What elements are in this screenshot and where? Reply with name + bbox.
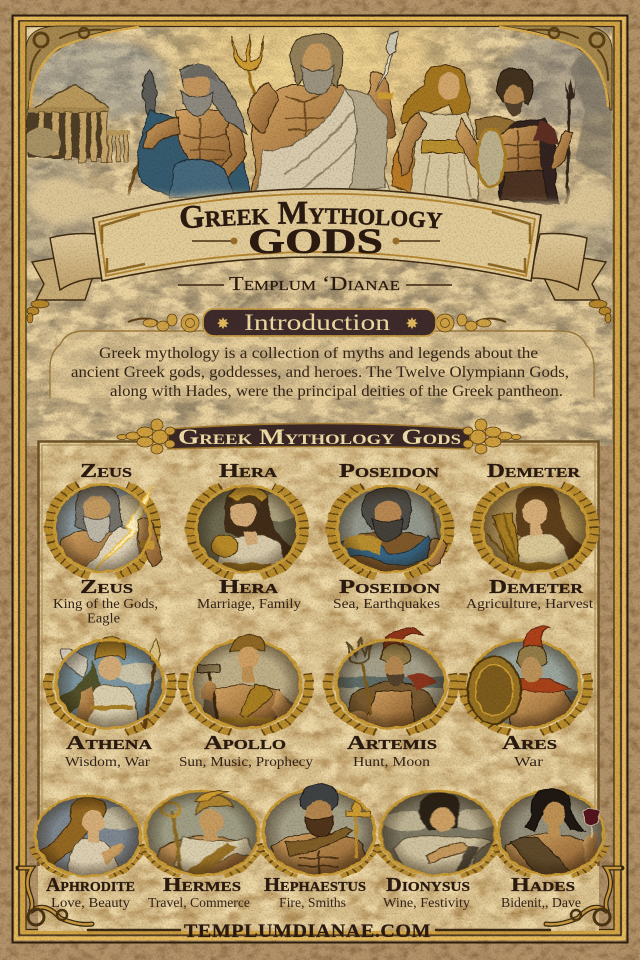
row 2 titles and domains: Athena (66, 732, 153, 754)
row 1 titles and domains: Zeus (80, 576, 133, 598)
title text: Greek Mythology (180, 202, 443, 228)
medallion: Dionysus (377, 791, 499, 876)
medallion: Zeus (49, 484, 162, 576)
illustration: temple (24, 84, 130, 162)
introduction paragraph: along with Hades, were the principal deities of the Greek pantheon. (110, 383, 563, 400)
medallion: Hephaestus (260, 784, 378, 876)
rocky cliff right (570, 52, 612, 180)
introduction paragraph: ancient Greek gods, goddesses, and heroes. The Twelve Olympiann Gods, (71, 364, 569, 381)
row 1 name labels: Zeus (80, 460, 132, 482)
section heading banner: Greek Mythology Gods (178, 424, 461, 449)
row 2 titles and domains: War (514, 754, 544, 769)
introduction paragraph (71, 345, 569, 400)
illustration: central god Zeus with trident (231, 31, 398, 197)
row 2 titles and domains: Artemis (347, 732, 437, 754)
row 3 titles and domains: Hades (511, 874, 575, 896)
medallion: Poseidon (331, 486, 449, 576)
row 3 titles and domains: Hephaestus (264, 874, 366, 896)
footer website url: TEMPLUMDIANAE.COM (184, 921, 431, 942)
left ribbon tail (32, 258, 95, 300)
row 3 titles and domains: Aphrodite (46, 874, 135, 896)
intro text frame (50, 331, 594, 398)
medallion: Ares (462, 626, 588, 732)
illustration: goddess (392, 65, 494, 200)
illustration: warrior with shield and trident (475, 68, 576, 205)
row 1 name labels: Demeter (487, 460, 581, 482)
introduction heading pill: Introduction (244, 310, 391, 335)
row 2 titles and domains: Apollo (204, 732, 286, 754)
flower ornament right (463, 419, 521, 454)
row 2 titles and domains: Wisdom, War (65, 754, 151, 769)
row 2 titles and domains (65, 732, 557, 769)
row 1 titles and domains: Marriage, Family (197, 596, 301, 611)
ornament: bottom-left corner scroll (18, 868, 180, 933)
row 3 titles and domains: Dionysus (386, 874, 470, 896)
ornament: top-left corner scroll (26, 26, 140, 110)
row 2 titles and domains: Hunt, Moon (353, 754, 430, 769)
row 3 titles and domains: Bidenit,, Dave (501, 895, 581, 910)
illustration: left sea god (128, 64, 252, 198)
introduction heading pill (128, 309, 506, 336)
medallion: Apollo (183, 635, 309, 732)
scroll ornament left (128, 314, 199, 332)
ornament: top-right corner scroll (498, 26, 612, 110)
subtitle: Templum ‘Dianae (229, 273, 400, 295)
row 2 titles and domains: Sun, Music, Prophecy (179, 754, 313, 769)
left ribbon fold (50, 234, 102, 290)
row 3 titles and domains: Love, Beauty (51, 895, 130, 910)
medallion: Athena (48, 636, 172, 732)
row 1 titles and domains: King of the Gods, (53, 596, 158, 611)
introduction paragraph: Greek mythology is a collection of myths and legends about the (99, 345, 538, 362)
clouds over the base of the figures (28, 176, 615, 227)
row 1 titles and domains: Hera (219, 576, 279, 598)
row 1 name labels: Hera (219, 460, 278, 482)
panel: hero sky scene (15, 26, 620, 446)
main scroll panel (93, 189, 541, 281)
ornament: bottom-right corner scroll (436, 868, 622, 933)
row 1 name labels: Poseidon (339, 460, 439, 482)
title text: GODS (248, 221, 383, 261)
row 3 titles and domains: Hermes (163, 874, 241, 896)
medallion: Hades (495, 789, 607, 876)
row 3 titles and domains: Wine, Festivity (383, 895, 470, 910)
row 1 titles and domains: Agriculture, Harvest (466, 596, 593, 611)
medallion: Aphrodite (32, 796, 145, 877)
medallion: Hermes (142, 791, 262, 876)
panel: gods grid background (38, 441, 599, 931)
introduction heading pill: ✸ (216, 316, 230, 333)
row 2 titles and domains: Ares (502, 732, 557, 754)
row 3 titles and domains (46, 874, 581, 910)
row 1 titles and domains: Demeter (489, 576, 584, 598)
row 1 name labels (80, 460, 581, 482)
row 3 titles and domains: Fire, Smiths (279, 895, 346, 910)
scroll ornament right (436, 314, 506, 332)
title banner ribbon (32, 189, 606, 300)
section heading banner (117, 419, 521, 454)
row 3 titles and domains: Travel, Commerce (148, 895, 250, 910)
row 1 titles and domains: Poseidon (339, 576, 440, 598)
medallion: Artemis (328, 628, 454, 732)
ornament: scrollwork under banner corners (27, 300, 611, 323)
medallion: Hera (190, 485, 304, 576)
flower ornament left (117, 419, 175, 454)
title text (180, 202, 443, 261)
medallion: Demeter (476, 484, 594, 576)
row 1 titles and domains: Eagle (87, 610, 120, 626)
introduction heading pill: ✸ (405, 316, 419, 333)
right ribbon tail (540, 258, 606, 300)
row 1 titles and domains: Sea, Earthquakes (333, 596, 440, 611)
right ribbon fold (530, 234, 587, 290)
row 1 titles and domains (53, 576, 593, 626)
